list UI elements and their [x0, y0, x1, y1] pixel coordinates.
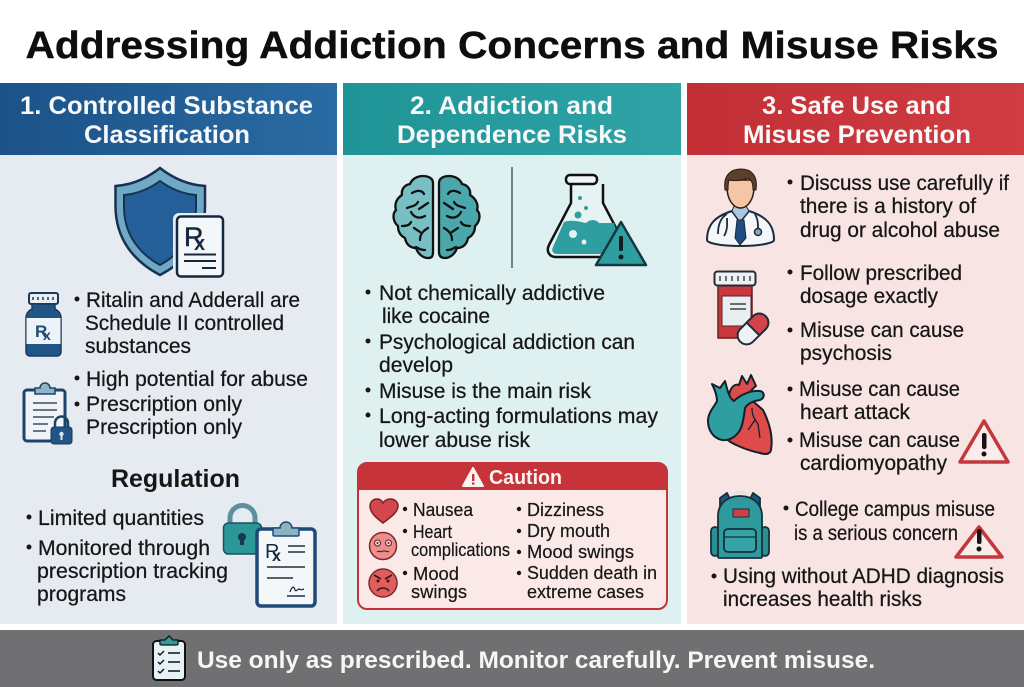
text: schedule II bullet: Schedule II controlled	[85, 312, 284, 335]
text: college campus bullet: is a serious concern	[794, 522, 958, 545]
text: caution left column: Heart	[413, 522, 452, 542]
heading: panel 3	[687, 83, 1024, 155]
icon: flask with warning	[548, 175, 646, 265]
text: risk bullets: Not chemically addictive	[379, 282, 605, 305]
panel: addiction and dependence risks	[343, 83, 681, 624]
icon: doctor	[707, 169, 774, 246]
text: dosage and psychosis bullets	[788, 262, 964, 365]
text: caution left column: Mood	[413, 564, 459, 584]
icon: medicine bottle	[26, 293, 61, 356]
panel: controlled substance classification	[0, 83, 337, 624]
icon: lock and prescription clipboard: R	[265, 541, 279, 563]
icon: anatomical heart	[708, 375, 772, 454]
text: caution right column: extreme cases	[527, 582, 644, 602]
text: schedule II bullet: Ritalin and Adderall are	[86, 289, 300, 312]
text: abuse and prescription bullets: Prescription only	[86, 416, 243, 439]
text: heart attack and cardiomyopathy bullets: cardiomyopathy	[800, 452, 947, 475]
heading: panel 2: Dependence Risks	[397, 121, 627, 149]
icon: dizzy face	[370, 532, 396, 560]
text: caution left column	[403, 500, 510, 602]
heading: panel 3: 3. Safe Use and	[762, 92, 951, 120]
icon: medicine bottle: R	[35, 322, 47, 341]
icon: shield with prescription: R	[184, 222, 204, 252]
icon: warning triangle small	[956, 527, 1002, 557]
icon: checklist clipboard	[153, 636, 185, 680]
text: heart attack and cardiomyopathy bullets	[788, 378, 960, 475]
text: risk bullets: Long-acting formulations may	[379, 405, 658, 428]
heading: regulation: Regulation	[111, 465, 240, 493]
text: risk bullets: Misuse is the main risk	[379, 380, 591, 403]
heading: panel 2	[343, 83, 681, 155]
text: caution left column: complications	[411, 540, 510, 560]
text: footer message: Use only as prescribed. Monitor carefully. Prevent misuse.	[197, 647, 875, 674]
text: caution left column: swings	[411, 582, 467, 602]
heading: panel 1: Classification	[84, 121, 250, 149]
text: caution right column	[517, 500, 657, 602]
text: caution left column: Nausea	[413, 500, 474, 520]
text: dosage and psychosis bullets: Misuse can cause	[800, 319, 964, 342]
text: regulation bullets: programs	[37, 583, 126, 606]
icon: shield with prescription: x	[194, 233, 205, 255]
text: college campus bullet: College campus misuse	[795, 498, 995, 521]
text: dosage and psychosis bullets: dosage exactly	[800, 285, 938, 308]
text: regulation bullets: prescription tracking	[37, 560, 228, 583]
icon: heart	[370, 499, 398, 523]
text: risk bullets	[366, 282, 658, 452]
icon: brain	[394, 176, 479, 258]
icon: angry face	[369, 569, 397, 597]
icon: medicine bottle: x	[43, 327, 51, 343]
text: schedule II bullet	[74, 289, 300, 358]
text: caution right column: Mood swings	[527, 542, 634, 562]
title: Addressing Addiction Concerns and Misuse Risks	[26, 25, 998, 67]
text: heart attack and cardiomyopathy bullets: Misuse can cause	[799, 378, 960, 401]
heading: panel 1	[0, 83, 337, 155]
text: discuss use bullet: there is a history of	[800, 195, 976, 218]
text: heart attack and cardiomyopathy bullets: Misuse can cause	[799, 429, 960, 452]
heading: caution: Caution	[489, 467, 562, 489]
text: risk bullets: like cocaine	[382, 305, 490, 328]
icon: backpack	[711, 492, 769, 558]
text: regulation bullets	[26, 507, 228, 606]
icon: lock and prescription clipboard: x	[272, 548, 281, 565]
text: abuse and prescription bullets: Prescription only	[86, 393, 243, 416]
heading: panel 2: 2. Addiction and	[410, 92, 613, 120]
icon: lock and prescription clipboard	[224, 505, 315, 606]
text: heart attack and cardiomyopathy bullets: heart attack	[800, 401, 910, 424]
text: caution right column: Dry mouth	[527, 521, 610, 541]
text: risk bullets: lower abuse risk	[379, 429, 530, 452]
text: risk bullets: Psychological addiction can	[379, 331, 635, 354]
icon: shield with prescription	[116, 168, 227, 280]
text: abuse and prescription bullets: High potential for abuse	[86, 368, 308, 391]
icon: warning triangle	[960, 421, 1008, 462]
callout: caution box	[358, 463, 667, 609]
icon: clipboard with lock	[24, 383, 72, 444]
divider between icons	[511, 167, 513, 268]
text: abuse and prescription bullets	[74, 368, 308, 439]
text: risk bullets: develop	[379, 354, 453, 377]
heading: panel 1: 1. Controlled Substance	[20, 92, 313, 120]
icon: caution triangle	[463, 468, 483, 486]
text: discuss use bullet: drug or alcohol abuse	[800, 219, 1000, 242]
text: dosage and psychosis bullets: psychosis	[800, 342, 892, 365]
text: college campus bullet	[784, 498, 995, 545]
panel: safe use and misuse prevention	[687, 83, 1024, 624]
text: caution right column: Sudden death in	[527, 563, 657, 583]
text: caution right column: Dizziness	[527, 500, 604, 520]
text: schedule II bullet: substances	[85, 335, 191, 358]
text: regulation bullets: Monitored through	[38, 537, 210, 560]
text: ADHD diagnosis bullet	[712, 565, 1004, 611]
text: discuss use bullet	[788, 172, 1009, 242]
text: dosage and psychosis bullets: Follow prescribed	[800, 262, 962, 285]
text: discuss use bullet: Discuss use carefully if	[800, 172, 1009, 195]
heading: panel 3: Misuse Prevention	[743, 121, 971, 149]
text: regulation bullets: Limited quantities	[38, 507, 204, 530]
icon: pill bottle and capsule	[714, 272, 772, 348]
text: ADHD diagnosis bullet: increases health risks	[723, 588, 922, 611]
footer banner	[0, 630, 1024, 687]
text: ADHD diagnosis bullet: Using without ADHD diagnosis	[723, 565, 1004, 588]
